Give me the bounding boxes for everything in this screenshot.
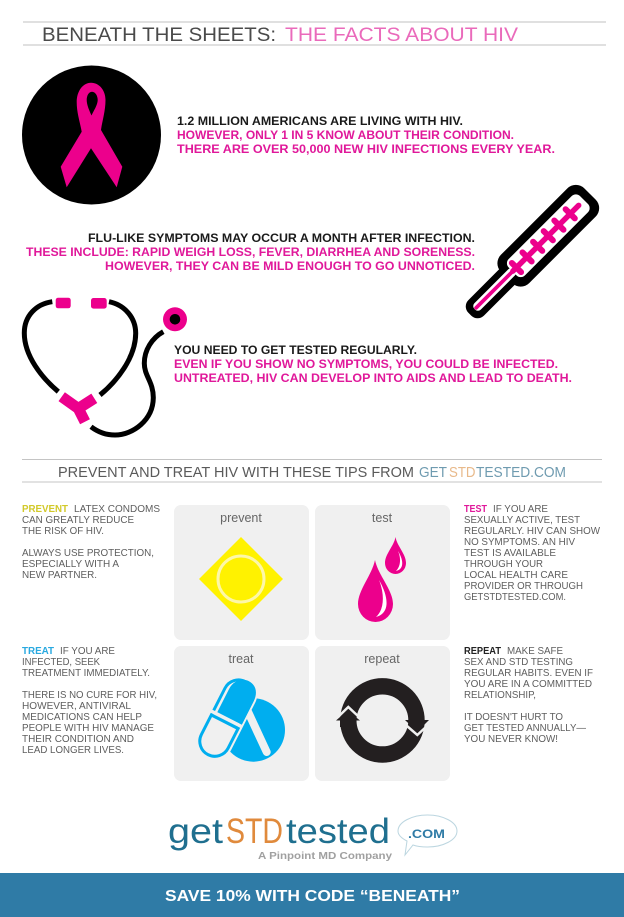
text block: treat: [22, 646, 157, 756]
panel: treat: treat: [228, 652, 254, 666]
text block: treat: TREAT: [22, 646, 55, 657]
promo banner: SAVE 10% WITH CODE “BENEATH”: [165, 888, 460, 905]
text block: test: TEST: [464, 504, 488, 515]
heading: tips: STD: [449, 464, 476, 481]
text block: prevent: LATEX CONDOMS: [74, 504, 160, 515]
text block: symptoms: FLU-LIKE SYMPTOMS MAY OCCUR A MONTH AFTER INFECTION.: [88, 231, 475, 245]
text block: treat: HOWEVER, ANTIVIRAL: [22, 701, 131, 712]
text block: test: THROUGH YOUR: [464, 559, 543, 570]
text block: test: IF YOU ARE: [493, 504, 548, 515]
text block: test: SEXUALLY ACTIVE, TEST: [464, 515, 581, 526]
panel: treat: [174, 646, 309, 781]
text block: living with HIV: [177, 114, 555, 156]
icon: awareness ribbon: [22, 66, 161, 204]
text block: repeat: YOU ARE IN A COMMITTED: [464, 679, 592, 690]
panel: prevent: prevent: [220, 511, 262, 525]
text block: get tested: EVEN IF YOU SHOW NO SYMPTOMS, YOU COULD BE INFECTED.: [174, 357, 558, 371]
text block: prevent: ALWAYS USE PROTECTION,: [22, 548, 154, 559]
text block: repeat: IT DOESN'T HURT TO: [464, 712, 563, 723]
text block: living with HIV: THERE ARE OVER 50,000 NEW HIV INFECTIONS EVERY YEAR.: [177, 142, 555, 156]
text block: repeat: SEX AND STD TESTING: [464, 657, 573, 668]
heading: tips: [22, 460, 602, 482]
logo: getSTDtested.com: A Pinpoint MD Company: [258, 850, 392, 862]
text block: treat: THEIR CONDITION AND: [22, 734, 134, 745]
heading: tips: TESTED.COM: [476, 464, 566, 481]
text block: test: TEST IS AVAILABLE: [464, 548, 556, 559]
panel: prevent: [174, 505, 309, 640]
text block: repeat: REGULAR HABITS. EVEN IF: [464, 668, 593, 679]
text block: repeat: [464, 646, 593, 745]
text block: treat: THERE IS NO CURE FOR HIV,: [22, 690, 157, 701]
icon: thermometer: [456, 180, 604, 328]
text block: living with HIV: 1.2 MILLION AMERICANS ARE LIVING WITH HIV.: [177, 114, 463, 128]
text block: prevent: PREVENT: [22, 504, 69, 515]
text block: treat: IF YOU ARE: [60, 646, 115, 657]
text block: test: REGULARLY. HIV CAN SHOW: [464, 526, 600, 537]
text block: repeat: REPEAT: [464, 646, 502, 657]
text block: test: PROVIDER OR THROUGH: [464, 581, 583, 592]
text block: living with HIV: HOWEVER, ONLY 1 IN 5 KNOW ABOUT THEIR CONDITION.: [177, 128, 514, 142]
text block: repeat: GET TESTED ANNUALLY—: [464, 723, 587, 734]
text block: prevent: CAN GREATLY REDUCE: [22, 515, 134, 526]
icon: pills: [191, 672, 285, 764]
panel: test: test: [372, 511, 393, 525]
logo: getSTDtested.com: tested: [286, 812, 390, 851]
text block: repeat: YOU NEVER KNOW!: [464, 734, 558, 745]
text block: test: [464, 504, 600, 603]
title: THE FACTS ABOUT HIV: [285, 24, 518, 46]
icon: cycle arrows: [336, 686, 429, 755]
text block: get tested: YOU NEED TO GET TESTED REGULARLY.: [174, 343, 417, 357]
text block: test: GETSTDTESTED.COM.: [464, 592, 566, 603]
heading: tips: GET: [419, 464, 447, 481]
text block: treat: INFECTED, SEEK: [22, 657, 100, 668]
text block: test: LOCAL HEALTH CARE: [464, 570, 568, 581]
text block: treat: LEAD LONGER LIVES.: [22, 745, 124, 756]
text block: repeat: RELATIONSHIP,: [464, 690, 536, 701]
icon: condom wrapper: [199, 537, 283, 621]
text block: treat: PEOPLE WITH HIV MANAGE: [22, 723, 154, 734]
text block: prevent: ESPECIALLY WITH A: [22, 559, 119, 570]
logo: getSTDtested.com: get: [168, 812, 223, 851]
text block: prevent: [22, 504, 160, 581]
heading: tips: PREVENT AND TREAT HIV WITH THESE TIPS FROM: [58, 464, 414, 481]
text block: treat: TREATMENT IMMEDIATELY.: [22, 668, 150, 679]
text block: repeat: MAKE SAFE: [507, 646, 563, 657]
text block: symptoms: HOWEVER, THEY CAN BE MILD ENOUGH TO GO UNNOTICED.: [105, 259, 475, 273]
text block: treat: MEDICATIONS CAN HELP: [22, 712, 142, 723]
title: [23, 22, 606, 46]
title: BENEATH THE SHEETS:: [42, 24, 276, 46]
logo: getSTDtested.com: STD: [226, 812, 283, 851]
text block: get tested: UNTREATED, HIV CAN DEVELOP INTO AIDS AND LEAD TO DEATH.: [174, 371, 572, 385]
promo banner: [0, 873, 624, 917]
icon: blood drops: [358, 537, 406, 622]
text block: test: NO SYMPTOMS. AN HIV: [464, 537, 575, 548]
logo: getSTDtested.com: .COM: [408, 827, 445, 841]
text block: symptoms: THESE INCLUDE: RAPID WEIGH LOSS, FEVER, DIARRHEA AND SORENESS.: [26, 245, 475, 259]
panel: test: [315, 505, 450, 640]
text block: symptoms: [26, 231, 475, 273]
text block: get tested: [174, 343, 572, 385]
panel: repeat: repeat: [364, 652, 400, 666]
logo: getSTDtested.com: [168, 812, 457, 862]
panel: repeat: [315, 646, 450, 781]
text block: prevent: NEW PARTNER.: [22, 570, 97, 581]
text block: prevent: THE RISK OF HIV.: [22, 526, 104, 537]
icon: stethoscope: [24, 298, 187, 435]
